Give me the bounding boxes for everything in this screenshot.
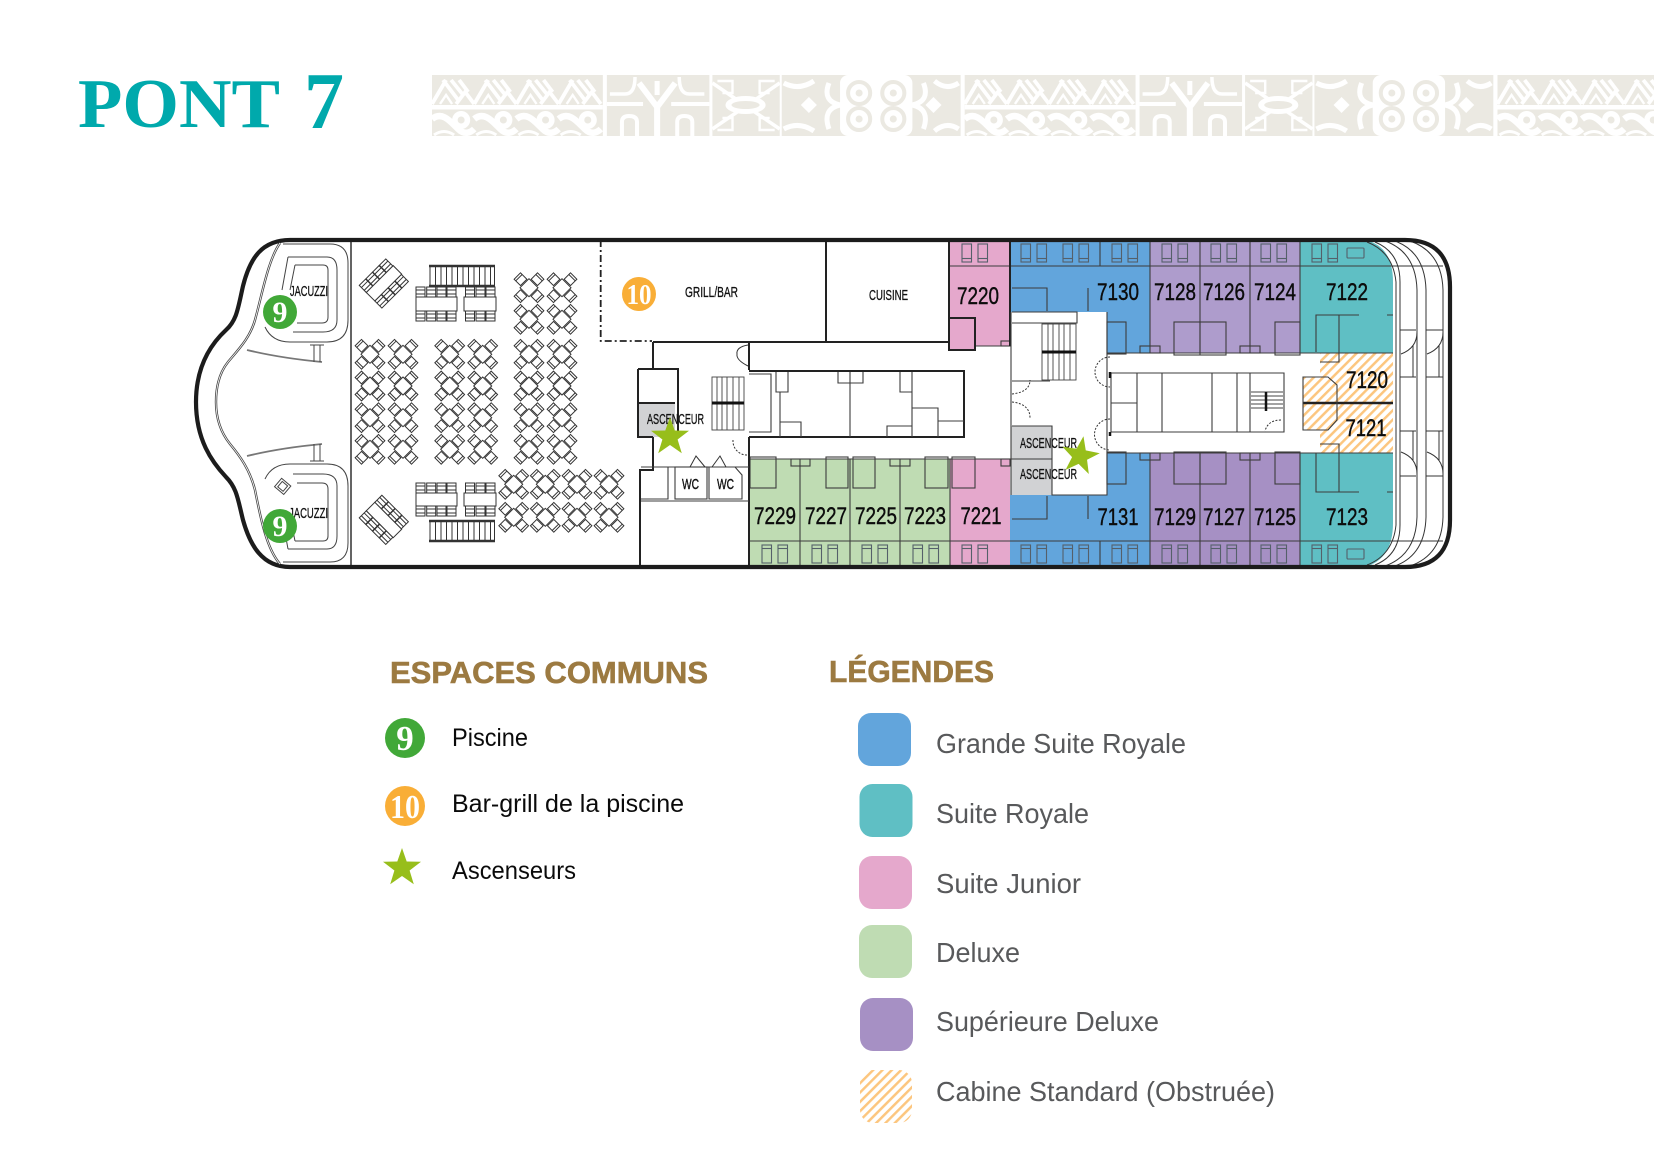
cabin numbers: 7130	[1097, 279, 1139, 306]
heading: LÉGENDES	[829, 654, 994, 689]
jacuzzis	[247, 244, 348, 562]
cabin numbers: 7122	[1326, 279, 1368, 306]
cabin numbers: 7124	[1254, 279, 1296, 306]
structural walls	[351, 240, 1393, 567]
decorative banner	[432, 75, 1654, 136]
area labels: WC	[717, 476, 734, 493]
title: PONT	[78, 66, 280, 143]
panel: légendes	[829, 654, 1275, 1123]
item: ascenseurs: Ascenseurs	[452, 857, 576, 885]
cabin numbers: 7129	[1154, 504, 1196, 531]
legend: suite royale: Suite Royale	[936, 798, 1089, 829]
item: piscine	[385, 718, 528, 758]
area labels	[647, 284, 1077, 493]
legend: suite junior: Suite Junior	[936, 868, 1081, 899]
panel: espaces communs	[383, 655, 708, 885]
cabin numbers: 7125	[1254, 504, 1296, 531]
legend: deluxe	[859, 925, 1020, 978]
cabin numbers: 7225	[855, 503, 897, 530]
tables	[355, 259, 624, 545]
area labels: CUISINE	[869, 287, 908, 304]
cabin numbers: 7121	[1346, 415, 1386, 442]
cabin numbers: 7123	[1326, 504, 1368, 531]
item: piscine: 9	[396, 719, 414, 758]
stairs	[712, 324, 1283, 430]
cabin numbers: 7120	[1346, 367, 1388, 394]
area labels: WC	[682, 476, 699, 493]
legend: supérieure deluxe: Supérieure Deluxe	[936, 1006, 1159, 1037]
area labels: ASCENCEUR	[1020, 435, 1077, 452]
cabin walls and fittings	[750, 240, 1393, 567]
legend: suite royale	[860, 784, 1089, 837]
legend: grande suite royale	[858, 713, 1186, 766]
cabin numbers: 7131	[1098, 504, 1138, 531]
cabin numbers	[754, 279, 1388, 531]
legend: supérieure deluxe	[860, 998, 1159, 1051]
heading: ESPACES COMMUNS	[390, 655, 708, 690]
item: bar-grill: 10	[390, 789, 420, 826]
hull outline	[196, 240, 1450, 567]
legend: suite junior	[859, 856, 1081, 909]
legend: cabine standard	[860, 1070, 1275, 1123]
cabin numbers: 7126	[1203, 279, 1245, 306]
deck plan	[196, 240, 1450, 567]
cabin numbers: 7127	[1203, 504, 1245, 531]
cabin numbers: 7220	[957, 283, 999, 310]
cabin numbers: 7223	[904, 503, 946, 530]
cabin numbers: 7128	[1154, 279, 1196, 306]
map markers: 9	[272, 296, 288, 329]
doors	[733, 357, 1281, 455]
area labels: ASCENCEUR	[1020, 466, 1077, 483]
area labels: GRILL/BAR	[685, 284, 738, 301]
item: bar-grill	[385, 786, 684, 826]
stern lines	[1367, 241, 1443, 566]
title: 7	[304, 58, 344, 146]
legend: deluxe: Deluxe	[936, 937, 1020, 968]
item: piscine: Piscine	[452, 724, 528, 752]
map markers: 9	[272, 510, 288, 543]
cabin numbers: 7227	[805, 503, 847, 530]
item: ascenseurs	[383, 848, 576, 885]
map markers: 10	[626, 280, 652, 311]
map markers	[263, 277, 1102, 543]
legend: grande suite royale: Grande Suite Royale	[936, 728, 1186, 759]
cabin colour areas	[638, 240, 1393, 567]
beds	[762, 244, 1364, 563]
cabin numbers: 7229	[754, 503, 796, 530]
jacuzzis: JACUZZI	[290, 283, 328, 300]
legend: cabine standard: Cabine Standard (Obstruée)	[936, 1076, 1275, 1107]
jacuzzis: JACUZZI	[289, 505, 328, 522]
title	[78, 58, 344, 146]
item: bar-grill: Bar-grill de la piscine	[452, 790, 684, 818]
area labels: ASCENCEUR	[647, 411, 704, 428]
cabin numbers: 7221	[960, 503, 1002, 530]
